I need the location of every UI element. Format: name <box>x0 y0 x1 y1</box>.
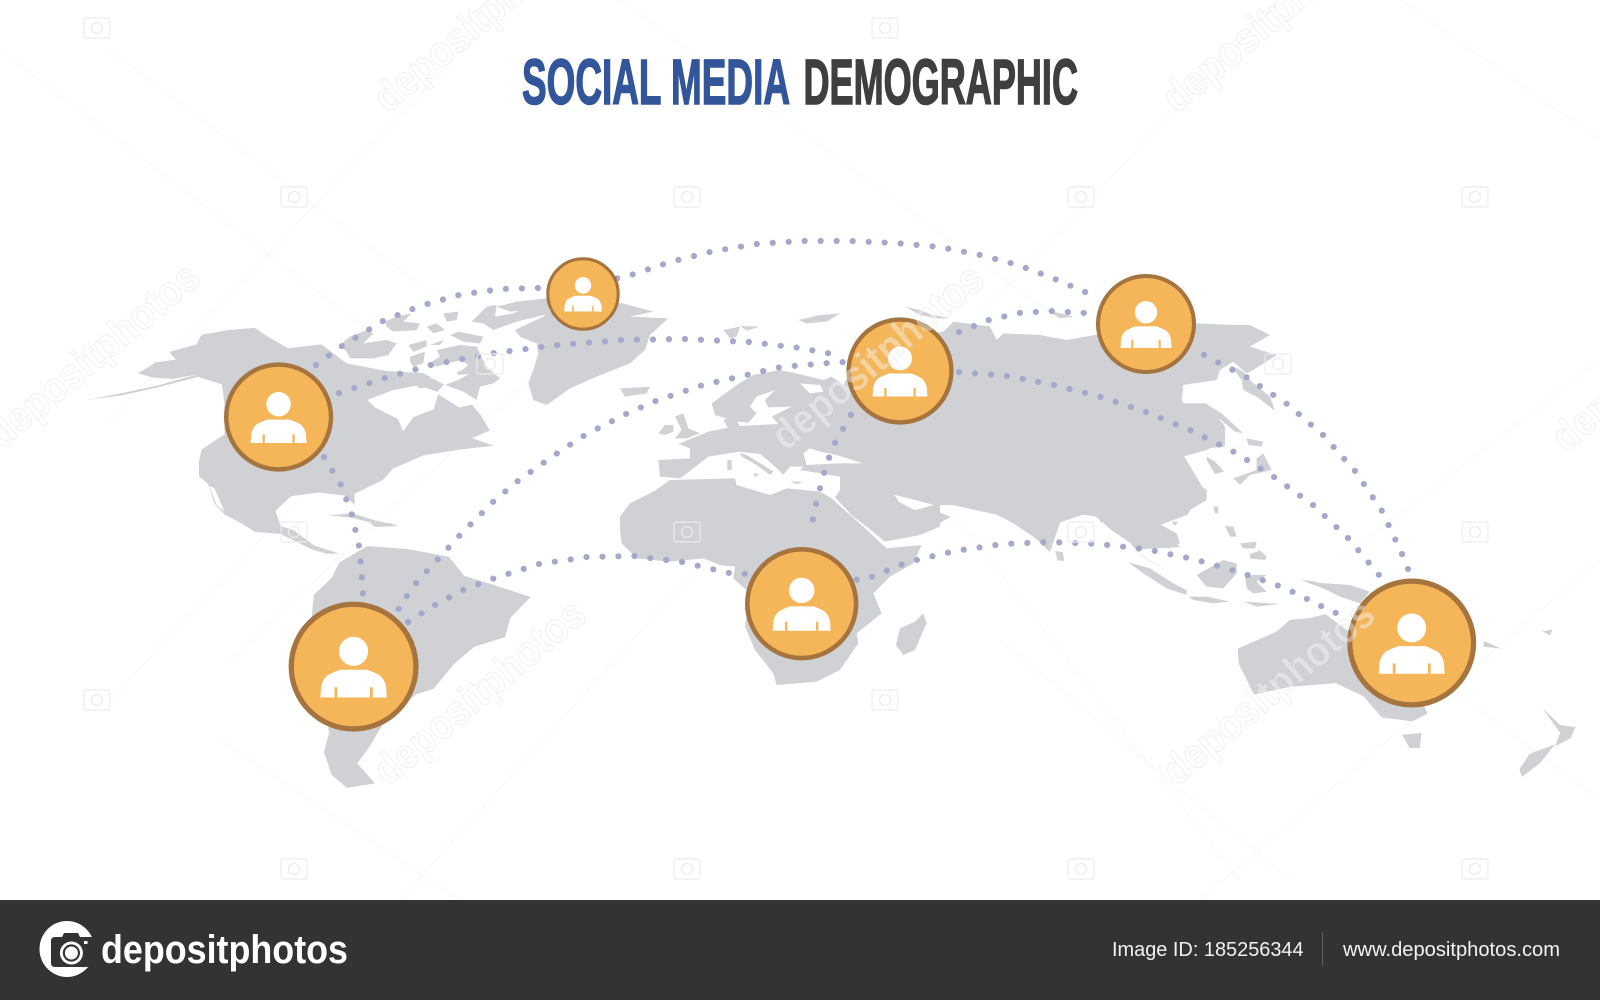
brand name: depositphotos <box>101 928 348 972</box>
line europe to australia <box>959 372 1379 575</box>
south asia and arabia <box>861 411 1203 561</box>
title: DEMOGRAPHIC <box>804 46 1078 118</box>
marker: north america <box>226 365 331 469</box>
watermark: depositphotos <box>762 254 992 459</box>
image id: Image ID: 185256344 <box>1112 939 1304 961</box>
line north america to europe <box>339 339 843 393</box>
marker: greenland <box>548 259 618 329</box>
watermark: depositphotos <box>1153 589 1383 794</box>
marker: south america <box>291 604 416 729</box>
icon: camera logo <box>40 921 95 977</box>
top arc line <box>316 241 1092 365</box>
marker: europe <box>849 320 951 422</box>
line south america to europe <box>398 362 845 622</box>
marker: africa <box>747 549 856 658</box>
world map <box>87 298 1576 788</box>
line north america to south america <box>324 457 363 594</box>
east and southeast asia <box>1100 400 1370 607</box>
watermark: depositphotos <box>364 589 594 794</box>
line europe to siberia <box>959 311 1084 332</box>
title: SOCIAL MEDIA <box>522 46 790 118</box>
footer bar <box>0 900 1600 1000</box>
russia and far east <box>900 307 1277 497</box>
marker: australia <box>1350 581 1474 705</box>
line siberia to australia <box>1204 355 1408 569</box>
line europe to africa <box>810 415 851 535</box>
europe and middle east <box>658 313 940 542</box>
arctic islands and greenland <box>342 298 668 405</box>
americas <box>87 328 531 788</box>
marker: siberia <box>1098 276 1194 372</box>
watermark <box>0 0 1600 794</box>
website: www.depositphotos.com <box>1342 939 1560 961</box>
line south america to africa to australia <box>408 542 1343 622</box>
watermark camera icons <box>84 18 1488 879</box>
oceania <box>1238 614 1576 777</box>
dotted connection lines <box>316 241 1408 622</box>
africa <box>620 478 927 685</box>
